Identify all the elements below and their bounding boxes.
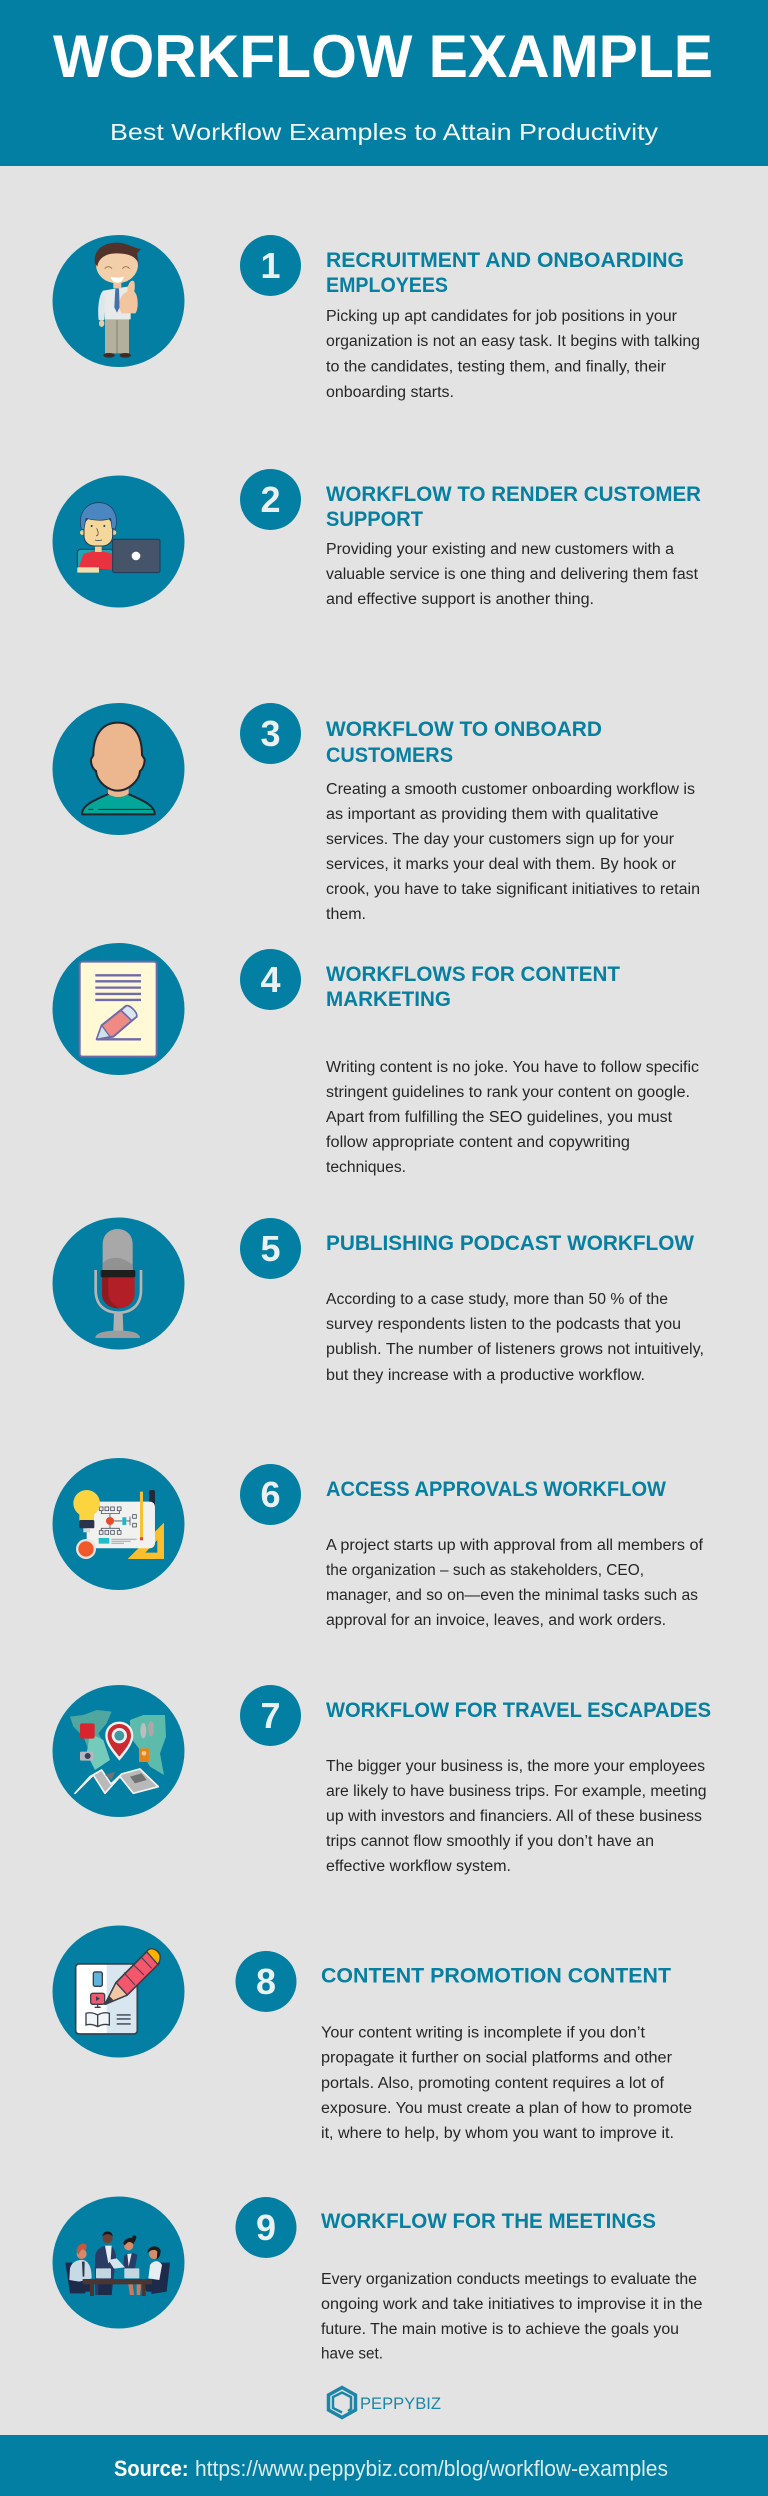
icon: businessman thumbs up [52,235,184,367]
heading 8: CONTENT PROMOTION CONTENT [321,1964,671,1988]
icon: content page and pencil [52,1926,184,2058]
body text 8: it, where to help, by whom you want to improve it. [321,2125,674,2142]
number badge 5: 5 [260,1228,281,1269]
number badge 3 [240,703,301,764]
number badge 6 [240,1464,301,1525]
body text 3: Creating a smooth customer onboarding workflow is [326,781,695,798]
icon: microphone [52,1218,184,1350]
icon: team meeting [52,2196,184,2328]
panel: step 8 content promotion [52,1926,692,2142]
body text 1 [326,308,700,401]
body text 4 [326,1059,699,1176]
number badge 3: 3 [260,713,281,754]
number badge 6: 6 [260,1474,281,1515]
body text 4: follow appropriate content and copywriting [326,1134,630,1151]
heading 7: WORKFLOW FOR TRAVEL ESCAPADES [326,1699,711,1722]
number badge 7: 7 [260,1695,281,1736]
body text 3 [326,781,700,923]
body text 1: organization is not an easy task. It begins with talking [326,333,700,350]
number badge 8 [236,1951,296,2012]
panel: step 3 onboard customers [52,703,700,923]
body text 2: and effective support is another thing. [326,591,594,608]
heading 4: WORKFLOWS FOR CONTENT [326,963,620,986]
body text 6: approval for an invoice, leaves, and work orders. [326,1612,666,1629]
icon: blueprint and light bulb [52,1458,184,1590]
title: WORKFLOW EXAMPLE [53,23,713,90]
body text 8: portals. Also, promoting content requires a lot of [321,2075,665,2092]
body text 2 [326,541,699,608]
heading 2: SUPPORT [326,508,423,531]
body text 1: to the candidates, testing them, and finally, their [326,358,666,376]
heading 4: MARKETING [326,988,451,1011]
heading 2 [326,483,701,531]
body text 7: are likely to have business trips. For example, meeting [326,1783,706,1800]
body text 9: have set. [321,2346,383,2362]
body text 8: exposure. You must create a plan of how to promote [321,2100,692,2117]
body text 1: onboarding starts. [326,384,454,401]
body text 6: A project starts up with approval from all members of [326,1537,704,1554]
heading 6: ACCESS APPROVALS WORKFLOW [326,1478,666,1501]
source url: https://www.peppybiz.com/blog/workflow-examples [195,2456,668,2481]
heading 3: CUSTOMERS [326,744,453,767]
heading 1: EMPLOYEES [326,274,448,297]
body text 3: them. [326,906,366,923]
body text 7: trips cannot flow smoothly if you don’t have an [326,1833,654,1850]
body text 9: Every organization conducts meetings to evaluate the [321,2271,697,2288]
number badge 7 [240,1685,301,1746]
number badge 5 [240,1218,301,1279]
number badge 4: 4 [260,959,281,1000]
heading 1: RECRUITMENT AND ONBOARDING [326,249,684,272]
heading 4 [326,963,620,1011]
number badge 9: 9 [256,2207,276,2248]
body text 9: ongoing work and take initiatives to improvise it in the [321,2296,702,2313]
body text 5 [326,1291,704,1384]
body text 4: techniques. [326,1159,406,1176]
number badge 1 [240,235,301,296]
panel: step 1 recruitment [52,235,700,401]
number badge 4 [240,949,301,1010]
logo wordmark: PEPPYBIZ [360,2395,441,2413]
body text 1: Picking up apt candidates for job positions in your [326,308,677,325]
body text 9 [321,2271,702,2362]
icon: travel map and pin [52,1685,184,1817]
body text 3: as important as providing them with qualitative [326,806,658,823]
body text 4: Writing content is no joke. You have to follow specific [326,1059,699,1076]
body text 7: effective workflow system. [326,1858,511,1875]
subtitle: Best Workflow Examples to Attain Productivity [110,119,659,145]
body text 8: propagate it further on social platforms and other [321,2050,672,2066]
panel: step 9 meetings [52,2196,702,2362]
source label: Source: [114,2456,188,2481]
number badge 1: 1 [260,245,281,286]
panel: step 2 customer support [52,469,701,608]
body text 8: Your content writing is incomplete if you don’t [321,2024,646,2042]
body text 6: manager, and so on—even the minimal tasks such as [326,1587,698,1604]
body text 7: The bigger your business is, the more your employees [326,1758,705,1775]
number badge 9 [236,2197,296,2258]
heading 1 [326,249,684,297]
body text 8 [321,2024,692,2142]
header banner [0,0,768,166]
heading 9: WORKFLOW FOR THE MEETINGS [321,2210,656,2233]
panel: step 4 content marketing [52,943,699,1176]
number badge 2: 2 [260,479,281,520]
body text 4: stringent guidelines to rank your content on google. [326,1084,690,1101]
body text 5: survey respondents listen to the podcasts that you [326,1316,681,1333]
body text 6: the organization – such as stakeholders, CEO, [326,1562,644,1579]
body text 3: services. The day your customers sign up for your [326,831,674,848]
body text 7: up with investors and financiers. All of these business [326,1808,702,1825]
heading 3 [326,718,602,767]
logo: PeppyBiz [328,2388,441,2418]
body text 2: Providing your existing and new customers with a [326,541,674,558]
icon: customer avatar [52,703,184,835]
panel: step 7 travel [52,1685,711,1875]
icon: logo hexagon [328,2388,356,2418]
body text 9: future. The main motive is to achieve the goals you [321,2321,679,2338]
icon: support agent with laptop [52,476,184,608]
heading 5: PUBLISHING PODCAST WORKFLOW [326,1232,694,1255]
body text 5: but they increase with a productive workflow. [326,1367,645,1384]
footer banner [0,2435,768,2496]
body text 2: valuable service is one thing and delivering them fast [326,566,699,583]
body text 3: crook, you have to take significant initiatives to retain [326,881,700,898]
body text 5: publish. The number of listeners grows not intuitively, [326,1341,704,1358]
panel: step 5 podcast [52,1218,704,1384]
panel: step 6 access approvals [52,1458,704,1629]
number badge 8: 8 [256,1961,276,2002]
body text 4: Apart from fulfilling the SEO guidelines, you must [326,1109,673,1126]
body text 5: According to a case study, more than 50 % of the [326,1291,668,1308]
heading 3: WORKFLOW TO ONBOARD [326,718,602,741]
heading 2: WORKFLOW TO RENDER CUSTOMER [326,483,701,506]
icon: document and pencil [52,943,184,1075]
body text 7 [326,1758,706,1875]
number badge 2 [240,469,301,530]
body text 3: services, it marks your deal with them. By hook or [326,856,676,873]
body text 6 [326,1537,704,1629]
